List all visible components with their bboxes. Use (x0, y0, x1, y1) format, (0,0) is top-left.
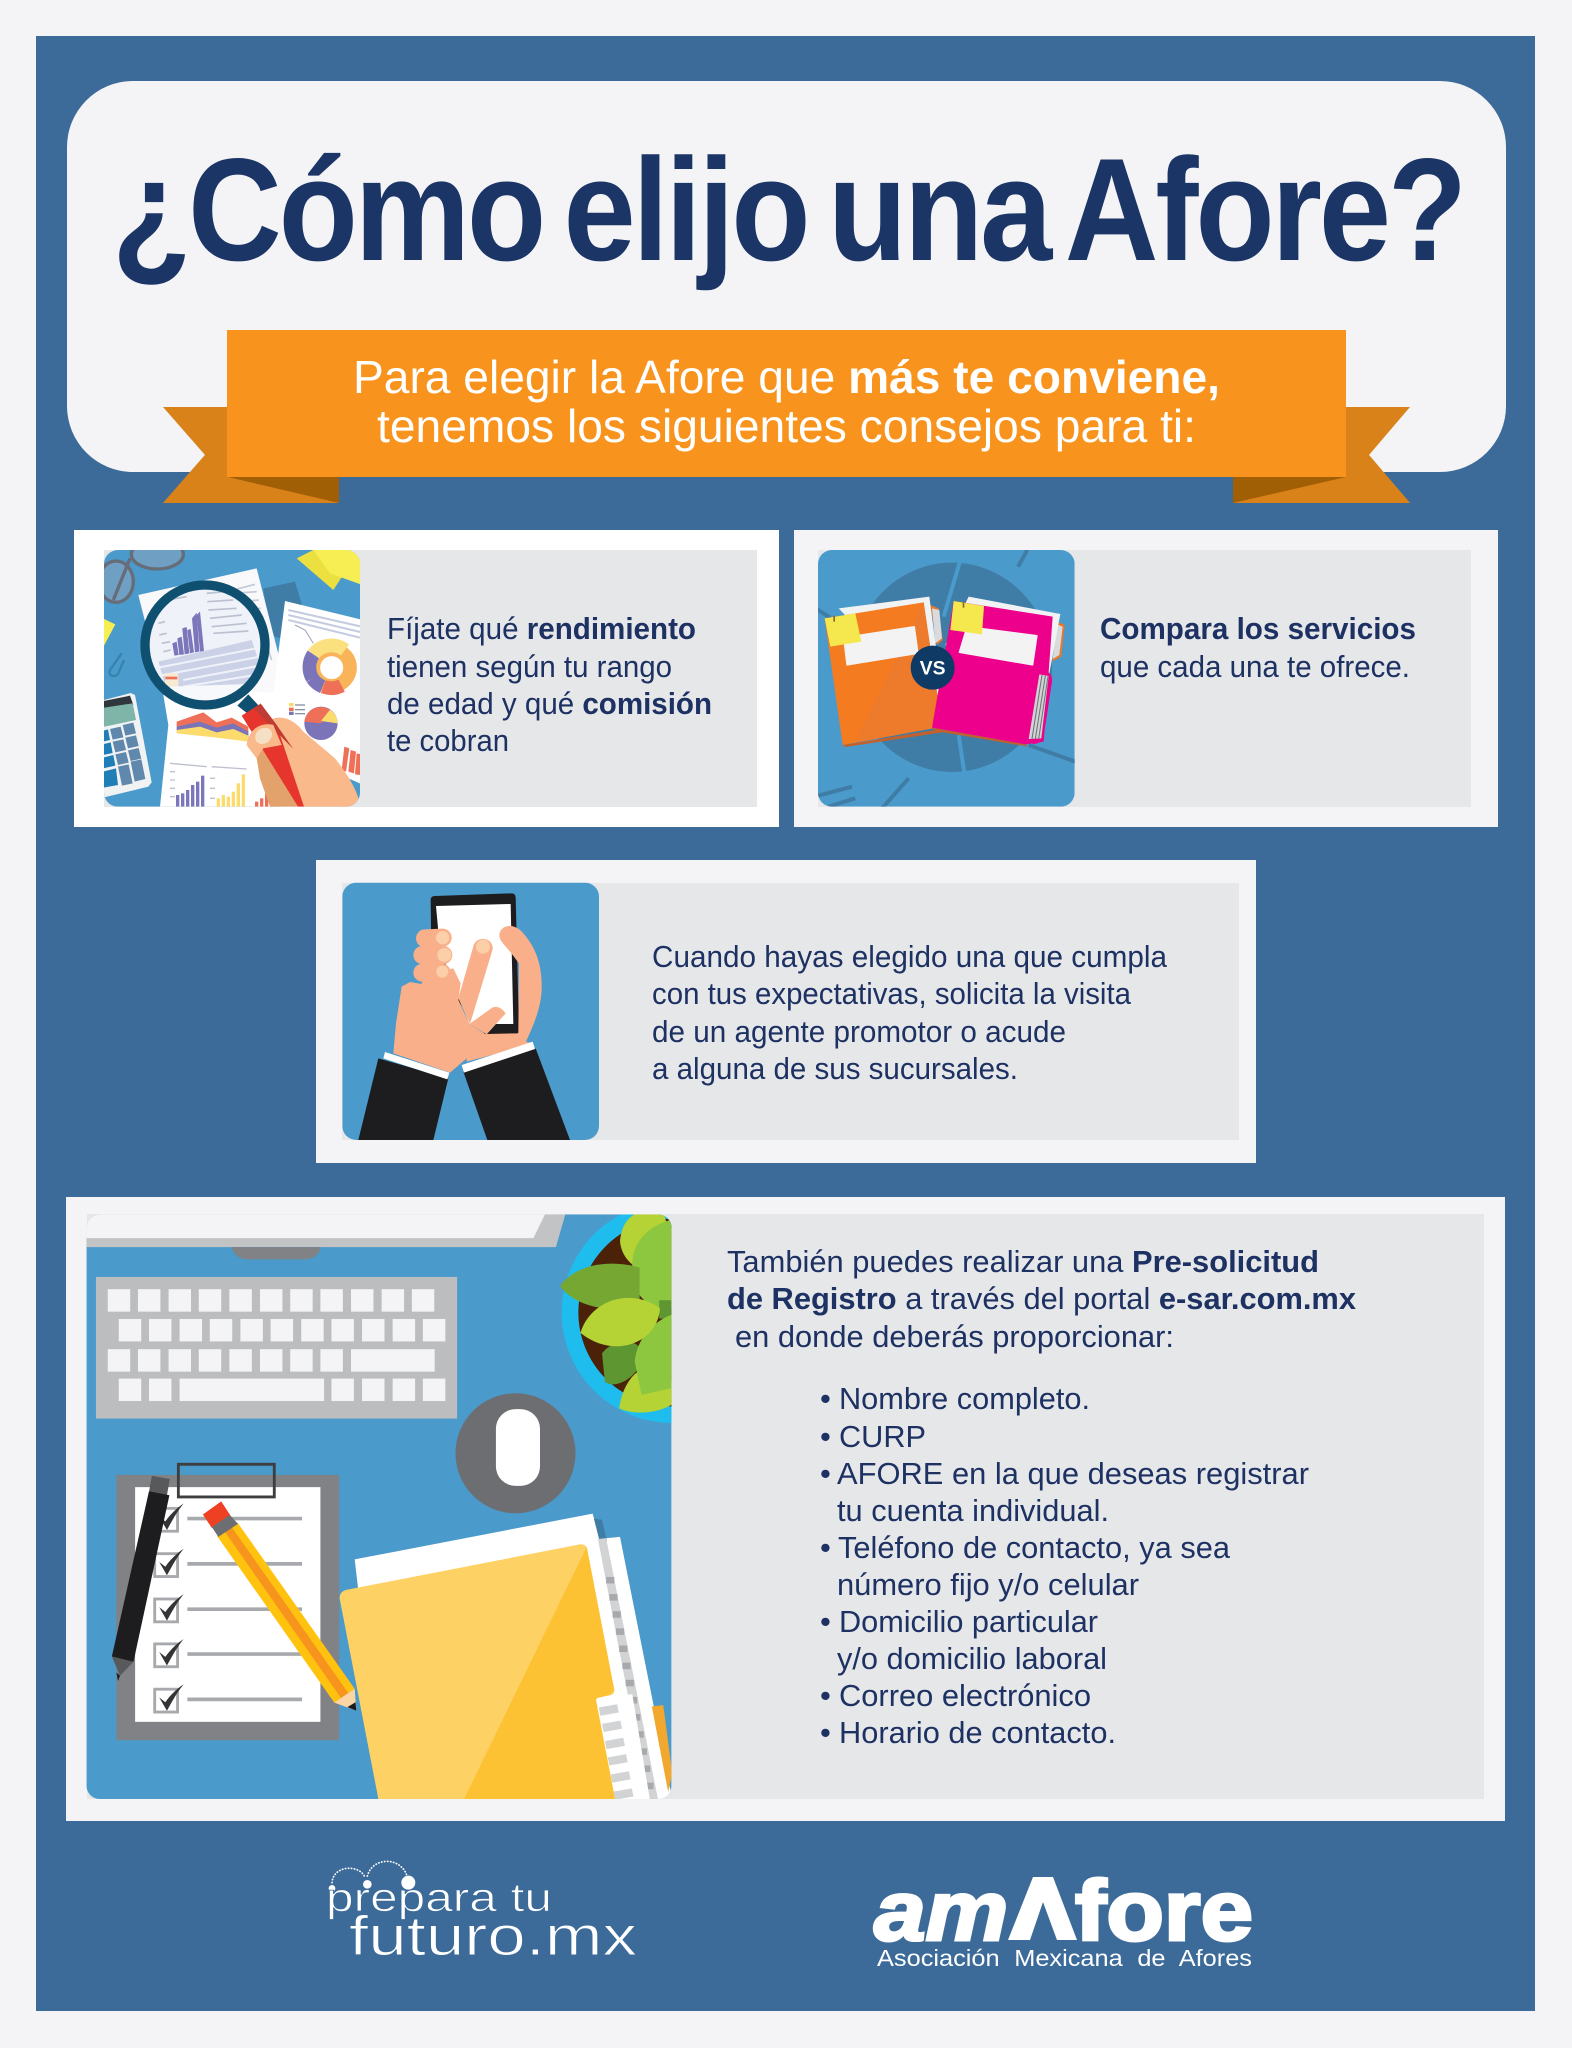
card frame (316, 860, 1256, 1163)
legend (289, 703, 305, 715)
requirements list: • (820, 1678, 831, 1713)
yellow folder (340, 1544, 650, 1800)
intro text (727, 1244, 1357, 1354)
logo subtitle: Asociación Mexicana de Afores (877, 1945, 1252, 1971)
pie chart (304, 707, 338, 740)
ribbon left tail extension (163, 455, 339, 503)
intro text: También puedes realizar una Pre-solicitud (727, 1244, 1319, 1279)
logo fore: fore (1075, 1864, 1253, 1959)
dark paper (263, 582, 304, 638)
card text: tienen según tu rango (387, 649, 672, 684)
ribbon text line 2: tenemos los siguientes consejos para ti: (377, 400, 1196, 452)
monitor (87, 1214, 565, 1259)
plant (560, 1202, 783, 1423)
magnifier (140, 578, 273, 715)
logo: amafore (874, 1864, 1253, 1971)
logo dots and arcs (329, 1861, 415, 1892)
requirements list: • (820, 1381, 831, 1416)
card text: te cobran (387, 723, 509, 758)
card frame (74, 530, 779, 827)
card text (652, 939, 1168, 1086)
mouse (456, 1393, 576, 1513)
requirements list: • (820, 1604, 831, 1639)
ribbon right tail extension (1233, 455, 1410, 503)
requirements list: • (820, 1419, 831, 1454)
folded fingers (422, 938, 443, 973)
card text area (104, 550, 757, 807)
keyboard (96, 1277, 457, 1419)
requirements list: y/o domicilio laboral (837, 1641, 1107, 1676)
pencil (203, 1501, 356, 1711)
clipboard (116, 1464, 339, 1740)
panel: pre-solicitud (66, 1197, 1505, 1821)
VS badge: VS (920, 658, 946, 679)
logo wordmark line 1: prepara tu (326, 1876, 552, 1920)
VS badge (911, 646, 955, 690)
card text: que cada una te ofrece. (1100, 649, 1410, 684)
card text: Compara los servicios (1100, 611, 1416, 646)
pink folder (932, 597, 1065, 747)
card text (1100, 611, 1416, 684)
panel: rendimiento (74, 530, 779, 827)
requirements list: Domicilio particular (839, 1604, 1098, 1639)
requirements list: Correo electrónico (839, 1678, 1091, 1713)
ribbon left fold (228, 477, 339, 503)
card text area (818, 550, 1471, 807)
logo: prepara tu futuro (326, 1861, 637, 1967)
card text area (87, 1214, 1484, 1799)
phone (431, 893, 519, 1034)
ribbon right tail (1333, 407, 1410, 503)
requirements list: tu cuenta individual. (837, 1493, 1109, 1528)
orange folder (825, 597, 944, 747)
glasses (104, 550, 185, 604)
illustration: desk (87, 1202, 783, 1800)
card text: de un agente promotor o acude (652, 1014, 1066, 1049)
left sleeve (358, 1058, 448, 1140)
sticky notes (104, 550, 361, 646)
card frame (794, 530, 1498, 827)
red bars right (342, 747, 362, 775)
bottom bar charts (170, 763, 278, 807)
illustration: hands with smartphone (342, 883, 599, 1140)
requirements list: • (820, 1530, 831, 1565)
right hand (467, 926, 542, 1062)
calculator (100, 693, 152, 798)
logo am: am (874, 1864, 1008, 1958)
requirements list (820, 1381, 1309, 1750)
paper 1 lines (236, 584, 272, 660)
requirements list: Nombre completo. (839, 1381, 1090, 1416)
ribbon front (227, 330, 1346, 477)
header panel (67, 81, 1506, 472)
paperclip (109, 653, 124, 676)
right cuff (462, 1042, 535, 1073)
card text area (342, 883, 1239, 1140)
logo wordmark line 2: futuro.mx (349, 1904, 637, 1967)
card text (387, 611, 712, 758)
requirements list: CURP (839, 1419, 926, 1454)
panel: servicios (794, 530, 1498, 827)
hand holding magnifier (242, 704, 359, 812)
card frame (66, 1197, 1505, 1821)
requirements list: Teléfono de contacto, ya sea (838, 1530, 1231, 1565)
dark pie (872, 562, 1052, 772)
finger nails (436, 931, 451, 978)
index nail (476, 940, 490, 954)
card text: Fíjate qué rendimiento (387, 611, 696, 646)
ribbon text line 1: Para elegir la Afore que más te conviene, (353, 351, 1220, 403)
requirements list: • (820, 1715, 831, 1750)
panel: agente promotor (316, 860, 1256, 1163)
logo lambda (1008, 1877, 1077, 1940)
folder papers (355, 1514, 672, 1799)
intro text: de Registro a través del portal e-sar.com.mx (727, 1281, 1357, 1316)
illustration: analysis papers with magnifier (99, 540, 363, 812)
right sleeve (463, 1048, 570, 1140)
papers front (160, 694, 274, 806)
requirements list: número fijo y/o celular (837, 1567, 1139, 1602)
requirements list: • (820, 1456, 831, 1491)
intro text: en donde deberás proporcionar: (735, 1319, 1174, 1354)
ribbon left tail (163, 407, 240, 503)
thumb (469, 1007, 506, 1034)
decorative strokes (815, 550, 1075, 808)
illustration: folders versus (815, 550, 1075, 808)
card text: Cuando hayas elegido una que cumpla (652, 939, 1168, 974)
index finger (458, 939, 493, 1024)
pie cuts and marks (944, 560, 965, 775)
card text: a alguna de sus sucursales. (652, 1051, 1018, 1086)
ribbon banner (163, 330, 1410, 503)
ribbon right fold (1233, 477, 1346, 503)
card text: con tus expectativas, solicita la visita (652, 976, 1132, 1011)
paper 2 with donut (273, 601, 363, 785)
paper 1 (138, 568, 278, 693)
left hand palm (393, 968, 490, 1073)
area chart (177, 712, 248, 742)
requirements list: Horario de contacto. (839, 1715, 1116, 1750)
requirements list: AFORE en la que deseas registrar (837, 1456, 1309, 1491)
pen (112, 1476, 170, 1681)
card text: de edad y qué comisión (387, 686, 712, 721)
left cuff (383, 1052, 449, 1079)
